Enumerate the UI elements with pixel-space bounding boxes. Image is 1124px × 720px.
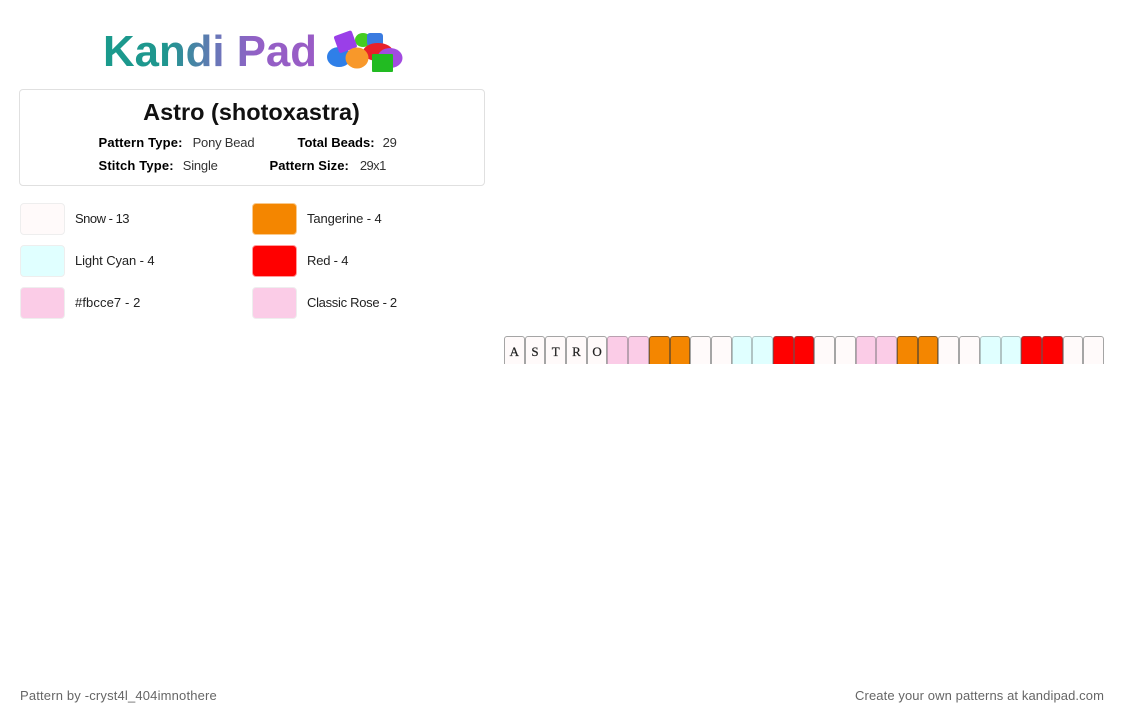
bead pattern row: T: [552, 344, 560, 359]
label: light cyan: Light Cyan - 4: [75, 253, 155, 268]
swatch: red: [252, 245, 297, 277]
meta: total beads: Total Beads: 29: [298, 135, 397, 150]
swatch: snow: [20, 203, 65, 235]
label: snow: Snow - 13: [75, 211, 129, 226]
bead pattern row: O: [592, 344, 602, 359]
meta: pattern type: Pattern Type: Pony Bead: [98, 135, 254, 150]
label: fbcce7: #fbcce7 - 2: [75, 295, 140, 310]
meta: stitch type: Stitch Type: Single: [98, 158, 218, 173]
meta: pattern size: Pattern Size: 29x1: [270, 158, 386, 173]
legend: [20, 203, 397, 319]
label: tangerine: Tangerine - 4: [307, 211, 382, 226]
icon: pile of beads: [327, 30, 402, 72]
title: Astro (shotoxastra): [143, 99, 360, 125]
bead pattern row: A: [510, 344, 519, 359]
bead pattern row: R: [572, 344, 581, 359]
swatch: light cyan: [20, 245, 65, 277]
bead pattern row: [504, 336, 1104, 364]
footer: site credit: Create your own patterns at kandipad.com: [855, 688, 1104, 702]
label: red: Red - 4: [307, 253, 348, 268]
swatch: fbcce7: [20, 287, 65, 319]
logo wordmark: Kandi Pad: [103, 27, 317, 76]
bead pattern row: S: [531, 344, 539, 359]
logo: [103, 27, 402, 76]
panel: pattern info: [19, 89, 485, 186]
footer: pattern credit: Pattern by -cryst4l_404imnothere: [20, 688, 217, 702]
label: classic rose: Classic Rose - 2: [307, 295, 397, 310]
swatch: tangerine: [252, 203, 297, 235]
swatch: classic rose: [252, 287, 297, 319]
